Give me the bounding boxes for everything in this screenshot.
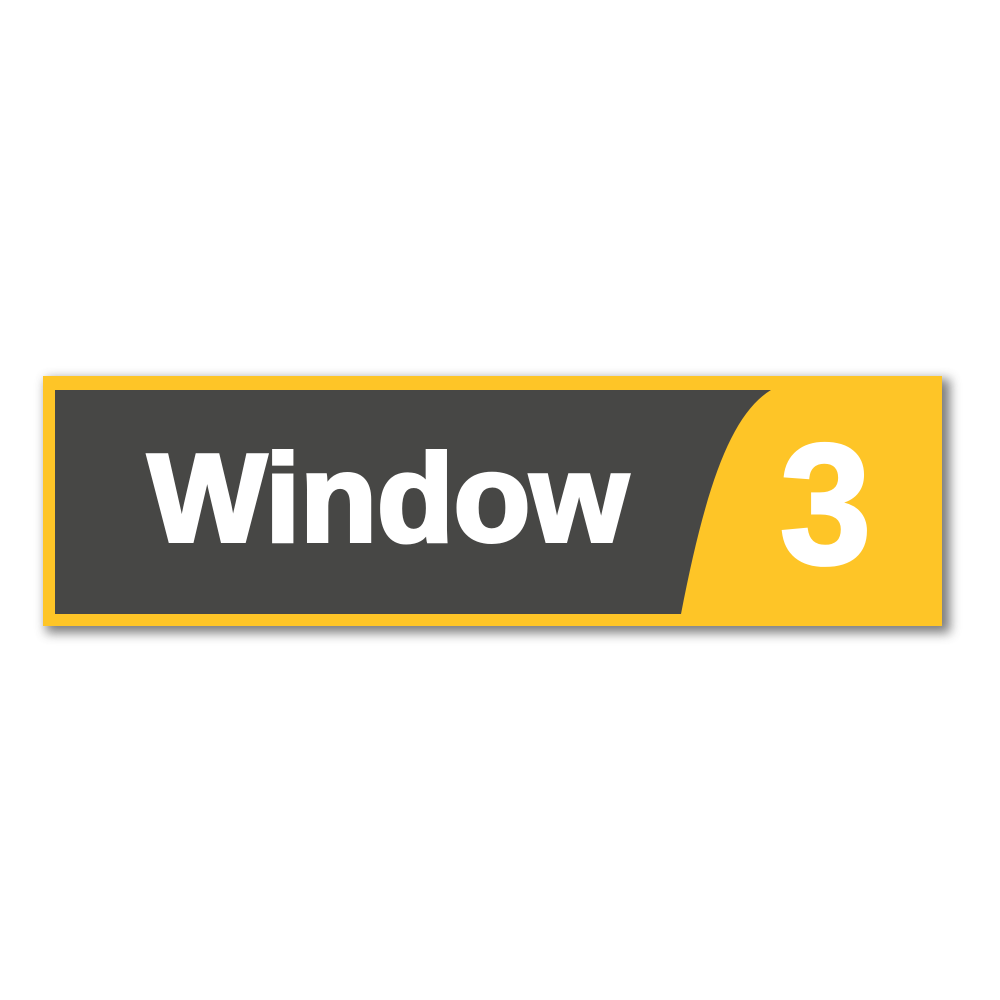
dark panel with curved edge xyxy=(55,390,771,614)
number: 3: 3 xyxy=(780,408,872,600)
sign xyxy=(43,376,942,626)
sign shadow xyxy=(46,379,950,633)
yellow sign background xyxy=(43,376,942,626)
label: Window: Window xyxy=(148,430,629,568)
